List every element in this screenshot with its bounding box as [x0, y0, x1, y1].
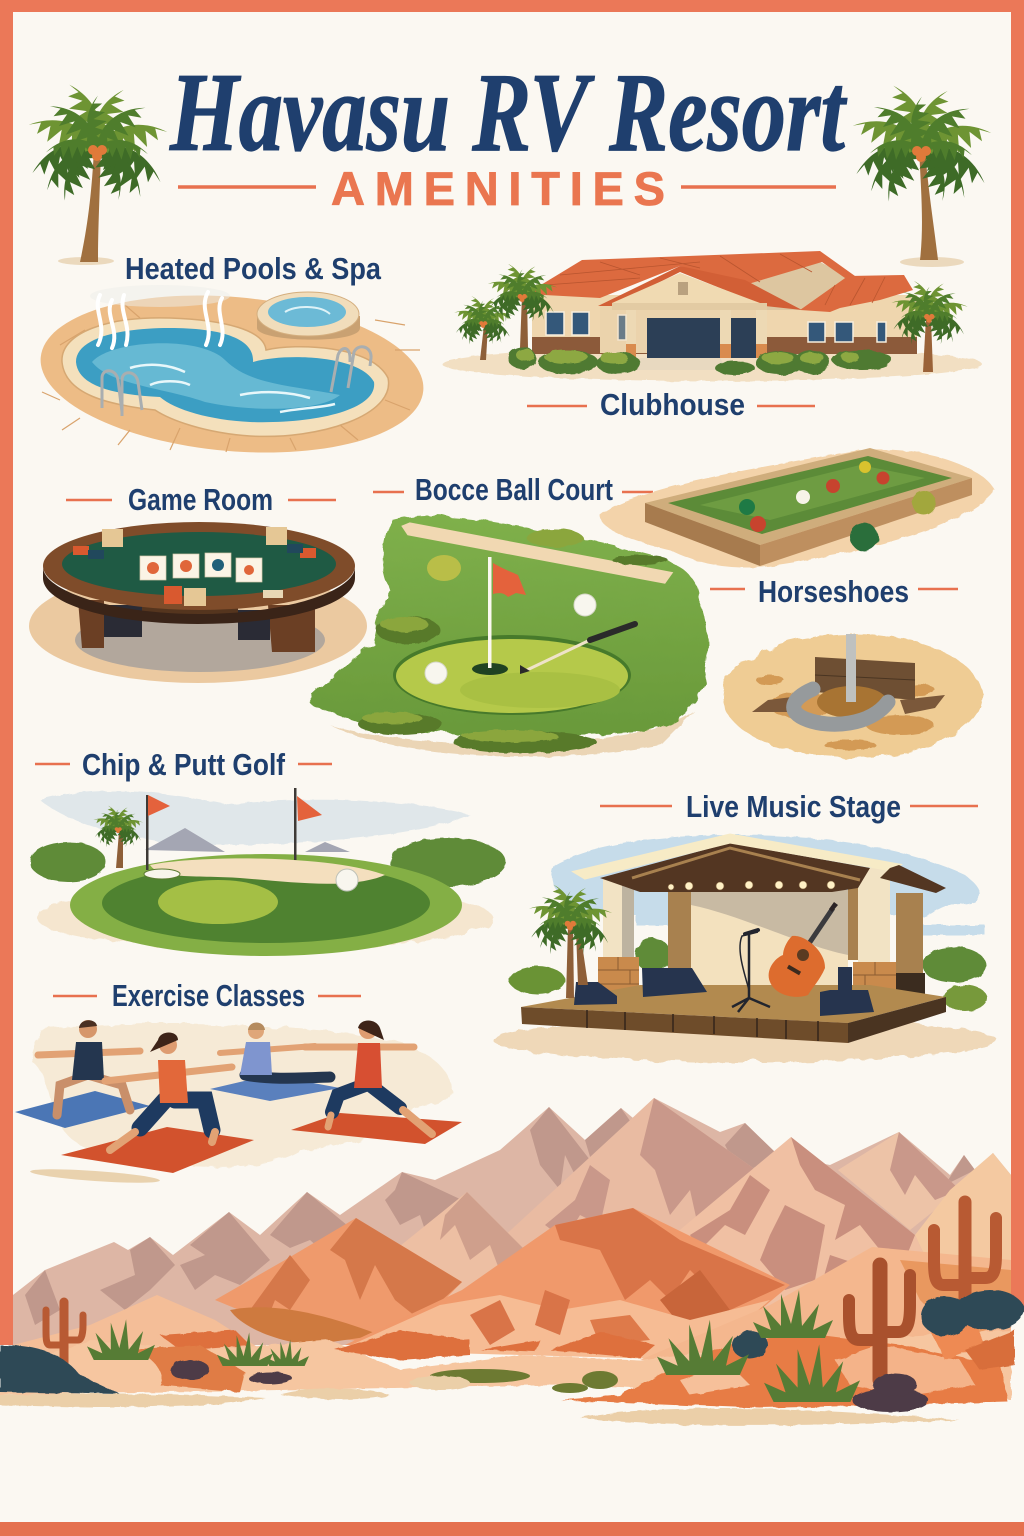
right peak — [838, 1132, 960, 1230]
yoga mats — [15, 1075, 462, 1173]
shrubs — [358, 529, 668, 753]
entrance — [612, 303, 767, 370]
bocce balls — [739, 461, 890, 532]
ladders — [102, 347, 371, 416]
heading: exercise classes: Exercise Classes — [112, 978, 305, 1013]
title: Havasu RV Resort — [169, 51, 847, 175]
roofs — [526, 251, 913, 312]
building walls — [532, 262, 917, 354]
columns — [598, 868, 925, 1005]
right foothill — [640, 1247, 1011, 1360]
horseshoe — [794, 689, 888, 724]
heading: live music stage: Live Music Stage — [686, 789, 901, 824]
orange central peak — [340, 1208, 790, 1360]
cacti — [46, 1202, 996, 1380]
icon: right palm tree — [850, 81, 994, 267]
palm — [527, 882, 614, 998]
windows — [546, 312, 886, 342]
panel: clubhouse illustration — [442, 251, 982, 381]
mid peak — [395, 1192, 540, 1330]
subtitle: amenities: AMENITIES — [331, 162, 665, 215]
spa — [257, 292, 360, 340]
cards and chips — [73, 527, 316, 606]
person: seated woman — [220, 1022, 330, 1078]
steam — [90, 285, 230, 348]
person: front warrior pose — [105, 1032, 232, 1150]
person: seated man — [38, 1020, 140, 1115]
panel: game table — [29, 522, 367, 683]
table legs — [78, 600, 315, 652]
agave plants — [87, 1290, 860, 1402]
tall peak — [500, 1098, 800, 1270]
icon: left palm tree — [26, 80, 170, 265]
microphone — [732, 930, 770, 1012]
heading: horseshoes: Horseshoes — [758, 574, 909, 609]
heading: bocce ball court: Bocce Ball Court — [415, 472, 613, 507]
sky and hills — [30, 791, 506, 886]
panel: desert mountains — [0, 1098, 1024, 1412]
pool water — [62, 318, 389, 436]
panel: pool illustration — [34, 281, 430, 467]
roof — [575, 835, 946, 893]
left foothill — [13, 1295, 340, 1385]
panel: putting green illustration — [307, 516, 708, 757]
heading: game room: Game Room — [128, 482, 273, 517]
hole, flag and club — [472, 557, 635, 675]
sand strokes — [0, 1376, 960, 1425]
guitar — [769, 902, 838, 997]
foreground band — [0, 1330, 1011, 1400]
dark bushes — [0, 1290, 1024, 1412]
putting green — [393, 635, 631, 715]
palms and shrubs — [453, 261, 969, 375]
court shrubs — [850, 491, 936, 551]
heading: clubhouse: Clubhouse — [600, 387, 745, 422]
rocks — [120, 1305, 1015, 1408]
shrubs — [509, 938, 987, 1011]
panel: bocce court — [600, 448, 995, 568]
far mauve range — [13, 1098, 1011, 1345]
panel: music stage — [493, 835, 997, 1062]
back wall — [691, 890, 848, 990]
panel: horseshoe pit — [722, 634, 982, 758]
stage platform — [521, 985, 946, 1043]
golf balls — [425, 594, 596, 684]
panel: chip and putt course — [30, 788, 506, 956]
person: standing warrior pose — [305, 1020, 432, 1134]
panel: yoga class — [15, 1020, 462, 1186]
string lights — [668, 881, 835, 890]
heading: heated pools and spa: Heated Pools & Spa — [125, 251, 382, 286]
flags — [146, 788, 322, 870]
back ridge shadows — [25, 1107, 975, 1325]
speakers — [574, 967, 874, 1016]
far right peak — [915, 1153, 1011, 1320]
orange left peak — [215, 1218, 462, 1345]
central big peak — [650, 1137, 950, 1320]
heading: chip and putt golf: Chip & Putt Golf — [82, 747, 286, 782]
